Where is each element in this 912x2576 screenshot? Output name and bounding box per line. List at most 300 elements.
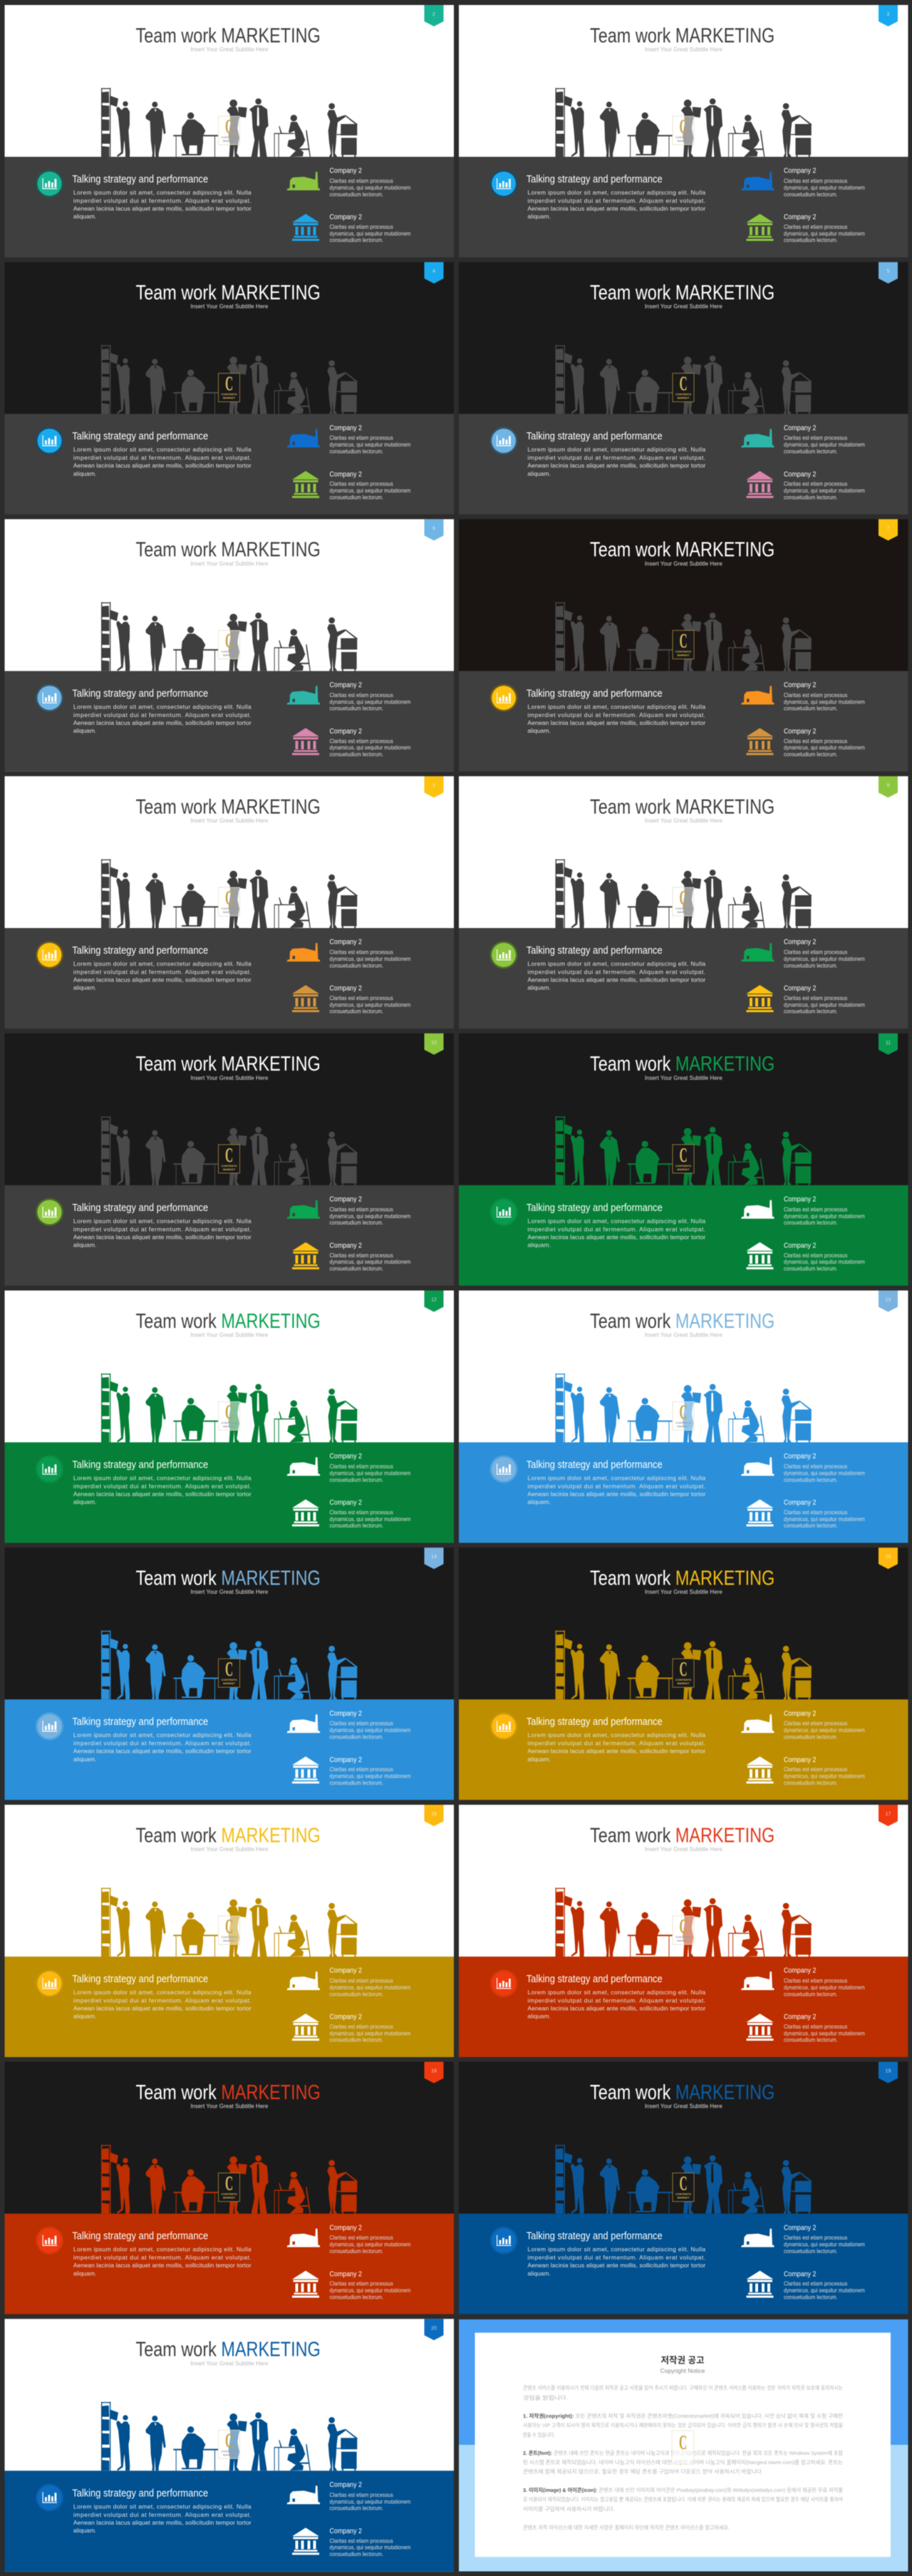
factory icon <box>286 686 320 704</box>
page ribbon: 6 <box>432 526 435 531</box>
subtitle: Insert Your Great Subtitle Here <box>645 1846 722 1853</box>
paragraph <box>527 1989 705 2020</box>
page ribbon: 2 <box>432 12 435 17</box>
paragraph: imperdiet volutpat dui at fermentum. Aliquam erat volutpat. <box>527 711 705 718</box>
notice section 3 image and icon <box>523 2487 843 2512</box>
paragraph <box>73 189 252 220</box>
company block 1 <box>329 1967 410 1997</box>
page ribbon <box>879 1805 898 1826</box>
watermark badge <box>673 2173 694 2202</box>
watermark badge <box>218 1401 239 1430</box>
company block 1 <box>784 938 865 969</box>
company block 2 <box>784 984 865 1015</box>
watermark badge: MARKET <box>677 1168 690 1171</box>
slide 8 <box>4 776 454 1029</box>
page ribbon <box>879 519 898 540</box>
company block 1: consuetudium lectorum. <box>329 1220 383 1226</box>
company block 2: Company 2 <box>329 984 362 993</box>
title: Team work MARKETING <box>135 2337 321 2361</box>
subtitle: Insert Your Great Subtitle Here <box>190 304 269 310</box>
bottom band <box>459 1443 908 1542</box>
chart icon <box>36 1456 63 1483</box>
heading: Talking strategy and performance <box>527 944 663 956</box>
heading: Talking strategy and performance <box>72 944 208 956</box>
bank icon <box>292 1500 319 1527</box>
paragraph: imperdiet volutpat dui at fermentum. Aliquam erat volutpat. <box>73 1740 252 1747</box>
heading: Talking strategy and performance <box>72 1459 208 1470</box>
paragraph <box>73 703 252 734</box>
watermark badge <box>218 2430 239 2458</box>
watermark badge: C <box>679 1401 688 1423</box>
bank icon <box>292 728 319 755</box>
paragraph: imperdiet volutpat dui at fermentum. Aliquam erat volutpat. <box>73 1997 252 2004</box>
heading: Talking strategy and performance <box>72 2230 208 2242</box>
company block 2: dynamicus, qui sequitur mutationem <box>329 1515 410 1523</box>
page ribbon: 13 <box>886 1297 891 1303</box>
watermark badge: MARKET <box>677 1939 690 1942</box>
company block 2: Claritas est etiam processus <box>329 2024 393 2030</box>
notice background top <box>459 2319 908 2445</box>
notice intro: 콘텐츠 서비스를 이용하시기 전에 다음의 저작권 공고 사항을 읽어 주시기 바랍니다. 구매하신 이 콘텐츠 서비스를 이용하는 것은 귀하가 저작권 보호에 동의하시는 <box>523 2385 843 2391</box>
company block 2: Claritas est etiam processus <box>784 995 848 1001</box>
company block 2: Claritas est etiam processus <box>784 738 848 745</box>
heading: Talking strategy and performance <box>527 1716 663 1727</box>
company block 2: Company 2 <box>784 213 816 222</box>
subtitle: Insert Your Great Subtitle Here <box>190 560 269 567</box>
heading: Talking strategy and performance <box>72 688 208 699</box>
subtitle: Insert Your Great Subtitle Here <box>645 304 722 310</box>
subtitle: Insert Your Great Subtitle Here <box>645 2103 722 2110</box>
paragraph <box>73 1474 252 1505</box>
chart icon <box>490 941 517 969</box>
title: Team work MARKETING <box>590 795 774 818</box>
slide background <box>4 1805 454 2057</box>
watermark badge: MARKET <box>223 2196 236 2200</box>
title: Team work MARKETING <box>135 537 321 561</box>
company block 2: Claritas est etiam processus <box>329 1766 393 1773</box>
title: Team work MARKETING <box>590 1309 774 1332</box>
company block 1 <box>784 1967 865 1997</box>
slide background <box>459 1034 908 1286</box>
page ribbon: 11 <box>886 1041 891 1046</box>
paragraph <box>73 2246 252 2277</box>
paragraph: imperdiet volutpat dui at fermentum. Aliquam erat volutpat. <box>73 1225 252 1232</box>
company block 2: Claritas est etiam processus <box>329 1252 393 1259</box>
watermark badge: MARKET <box>677 396 690 400</box>
watermark badge: MARKET <box>223 1424 236 1428</box>
factory icon <box>286 429 320 448</box>
heading: Talking strategy and performance <box>72 1202 208 1213</box>
company block 1: Company 2 <box>329 2224 362 2232</box>
paragraph: Aenean lacinia lacus aliquet ante mollis, sollicitudin tempor tortor <box>73 462 252 469</box>
company block 2: Claritas est etiam processus <box>784 1252 848 1259</box>
page ribbon: 15 <box>886 1555 891 1560</box>
notice watermark badge: C <box>679 2431 687 2453</box>
company block 2: dynamicus, qui sequitur mutationem <box>784 1515 865 1523</box>
subtitle: Insert Your Great Subtitle Here <box>645 1075 722 1081</box>
watermark badge: CONTENTS <box>221 2449 237 2453</box>
slide background <box>4 2062 454 2314</box>
company block 1: Company 2 <box>784 681 816 689</box>
factory icon <box>741 1200 774 1219</box>
company block 1: consuetudium lectorum. <box>784 1476 837 1483</box>
office silhouette <box>555 1374 812 1442</box>
company block 2: consuetudium lectorum. <box>329 1265 383 1272</box>
slide 18 <box>4 2062 454 2314</box>
paragraph: aliquam. <box>527 1756 551 1763</box>
chart icon <box>490 684 517 712</box>
company block 2: dynamicus, qui sequitur mutationem <box>329 1259 410 1265</box>
company block 2: consuetudium lectorum. <box>784 1523 837 1529</box>
page ribbon: 10 <box>431 1041 437 1046</box>
company block 1: Claritas est etiam processus <box>329 1206 393 1212</box>
paragraph: Lorem ipsum dolor sit amet, consectetur adipiscing elit. Nulla <box>527 189 705 196</box>
company block 1: Company 2 <box>329 424 362 433</box>
company block 1: Claritas est etiam processus <box>784 692 848 699</box>
slide background <box>459 262 908 515</box>
title: Team work MARKETING <box>590 281 774 304</box>
factory icon <box>286 1972 320 1990</box>
paragraph: Lorem ipsum dolor sit amet, consectetur adipiscing elit. Nulla <box>73 189 252 196</box>
watermark badge: MARKET <box>223 139 236 143</box>
paragraph: Aenean lacinia lacus aliquet ante mollis, sollicitudin tempor tortor <box>73 205 252 212</box>
company block 1: Company 2 <box>329 1967 362 1975</box>
paragraph: Aenean lacinia lacus aliquet ante mollis, sollicitudin tempor tortor <box>527 2262 705 2269</box>
bank icon <box>292 1242 319 1269</box>
company block 2: consuetudium lectorum. <box>784 2036 837 2044</box>
watermark badge: CONTENTS <box>675 2193 691 2196</box>
slide background <box>459 1547 908 1800</box>
paragraph: Aenean lacinia lacus aliquet ante mollis, sollicitudin tempor tortor <box>73 977 252 984</box>
chart icon <box>36 684 63 712</box>
company block 1: dynamicus, qui sequitur mutationem <box>329 2241 410 2248</box>
company block 1: dynamicus, qui sequitur mutationem <box>784 699 865 706</box>
heading: Talking strategy and performance <box>527 688 663 699</box>
subtitle: Insert Your Great Subtitle Here <box>645 46 722 53</box>
watermark badge: C <box>679 1915 688 1937</box>
paragraph: Lorem ipsum dolor sit amet, consectetur adipiscing elit. Nulla <box>527 1474 705 1481</box>
paragraph: aliquam. <box>73 1242 96 1249</box>
office silhouette <box>101 2145 358 2214</box>
page ribbon: 17 <box>886 1812 891 1817</box>
company block 2: Company 2 <box>329 1242 362 1250</box>
chart icon <box>490 427 517 455</box>
watermark badge <box>673 1658 694 1687</box>
company block 1: Company 2 <box>329 1195 362 1204</box>
watermark badge: MARKET <box>223 910 236 914</box>
company block 2 <box>784 2270 865 2300</box>
company block 1: Company 2 <box>329 938 362 947</box>
company block 2: Company 2 <box>784 984 816 993</box>
company block 1: consuetudium lectorum. <box>329 2248 383 2255</box>
page ribbon <box>425 2319 443 2340</box>
watermark badge: C <box>679 115 688 138</box>
company block 1: Claritas est etiam processus <box>784 2235 848 2241</box>
company block 1: dynamicus, qui sequitur mutationem <box>329 185 410 191</box>
office silhouette <box>101 2402 358 2471</box>
bottom band <box>4 1443 454 1542</box>
notice section 1 copyright: 사용자는 VIP 고객이 되시어 영리 목적으로 이용하시거나 재판매하지 못하는 것은 금지되어 있습니다. 이러한 금지 행위가 발견 시 손해 민사 및 형사상의 처벌을 <box>523 2422 843 2428</box>
factory icon <box>286 172 320 190</box>
page ribbon: 7 <box>887 526 890 531</box>
paragraph: imperdiet volutpat dui at fermentum. Aliquam erat volutpat. <box>73 2511 252 2518</box>
watermark badge: MARKET <box>677 910 690 914</box>
watermark badge: C <box>679 630 688 652</box>
slide background <box>459 1290 908 1542</box>
paragraph <box>73 1989 252 2020</box>
company block 2: Company 2 <box>329 1756 362 1764</box>
page ribbon: 4 <box>432 269 435 274</box>
paragraph: imperdiet volutpat dui at fermentum. Aliquam erat volutpat. <box>527 968 705 975</box>
company block 2: consuetudium lectorum. <box>784 1008 837 1015</box>
paragraph: Lorem ipsum dolor sit amet, consectetur adipiscing elit. Nulla <box>527 1731 705 1738</box>
bottom band <box>459 1699 908 1800</box>
paragraph <box>73 446 252 477</box>
company block 1: consuetudium lectorum. <box>329 705 383 712</box>
paragraph: aliquam. <box>73 2013 96 2020</box>
company block 2: dynamicus, qui sequitur mutationem <box>329 2030 410 2036</box>
watermark badge: CONTENTS <box>675 1421 691 1424</box>
paragraph: imperdiet volutpat dui at fermentum. Aliquam erat volutpat. <box>73 968 252 975</box>
page ribbon: 14 <box>431 1555 437 1560</box>
company block 1: consuetudium lectorum. <box>784 2248 837 2255</box>
page ribbon <box>879 262 898 284</box>
watermark badge <box>218 887 239 916</box>
bottom band <box>4 1185 454 1286</box>
company block 1: consuetudium lectorum. <box>329 1991 383 1997</box>
bank icon <box>747 985 774 1012</box>
subtitle: Insert Your Great Subtitle Here <box>645 560 722 567</box>
company block 2: dynamicus, qui sequitur mutationem <box>329 1001 410 1008</box>
slide background <box>459 1805 908 2057</box>
paragraph: aliquam. <box>527 1498 551 1505</box>
paragraph: Lorem ipsum dolor sit amet, consectetur adipiscing elit. Nulla <box>73 1474 252 1481</box>
paragraph <box>527 703 705 734</box>
company block 1: Claritas est etiam processus <box>329 2235 393 2241</box>
heading: Talking strategy and performance <box>527 173 663 185</box>
subtitle: Insert Your Great Subtitle Here <box>190 1846 269 1853</box>
company block 2 <box>329 2270 410 2300</box>
company block 2: consuetudium lectorum. <box>784 1265 837 1272</box>
notice section 3 image and icon: 이미지를 구입하여 사용하시기 바랍니다. <box>523 2506 615 2512</box>
slide background <box>4 1290 454 1542</box>
bottom band <box>4 2214 454 2314</box>
paragraph: Aenean lacinia lacus aliquet ante mollis, sollicitudin tempor tortor <box>527 462 705 469</box>
title: Team work MARKETING <box>135 1309 321 1332</box>
slide 11 <box>459 1034 908 1286</box>
paragraph: imperdiet volutpat dui at fermentum. Aliquam erat volutpat. <box>73 2254 252 2261</box>
company block 1: dynamicus, qui sequitur mutationem <box>329 956 410 962</box>
watermark badge: C <box>225 887 233 909</box>
title: Team work MARKETING <box>590 1823 774 1847</box>
bottom band <box>4 928 454 1029</box>
company block 1: consuetudium lectorum. <box>784 1991 837 1997</box>
factory icon <box>286 943 320 962</box>
paragraph <box>527 960 705 991</box>
page ribbon <box>879 1034 898 1055</box>
slide background <box>4 519 454 771</box>
notice section 1 copyright <box>523 2413 843 2438</box>
office silhouette <box>101 859 358 928</box>
subtitle: Insert Your Great Subtitle Here <box>190 818 269 824</box>
company block 2: Claritas est etiam processus <box>329 2538 393 2544</box>
factory icon <box>286 1457 320 1475</box>
watermark badge: CONTENTS <box>675 649 691 653</box>
slide 19 <box>459 2062 908 2314</box>
watermark badge: CONTENTS <box>675 1164 691 1168</box>
paragraph: aliquam. <box>73 1756 96 1763</box>
paragraph: aliquam. <box>527 1242 551 1249</box>
company block 2: consuetudium lectorum. <box>329 1523 383 1529</box>
company block 2: Company 2 <box>784 1499 816 1507</box>
office silhouette <box>101 1631 358 1699</box>
factory icon <box>286 1200 320 1219</box>
company block 1 <box>329 1453 410 1483</box>
company block 1 <box>784 424 865 455</box>
heading: Talking strategy and performance <box>527 2230 663 2242</box>
company block 1 <box>784 1195 865 1226</box>
watermark badge: MARKET <box>223 653 236 656</box>
slide 5 <box>459 262 908 515</box>
notice intro <box>523 2385 843 2401</box>
chart icon <box>36 1969 63 1997</box>
bank icon <box>747 471 774 498</box>
slide 6 <box>4 519 454 771</box>
paragraph: imperdiet volutpat dui at fermentum. Aliquam erat volutpat. <box>73 1483 252 1490</box>
paragraph: Lorem ipsum dolor sit amet, consectetur adipiscing elit. Nulla <box>527 2246 705 2253</box>
paragraph: Lorem ipsum dolor sit amet, consectetur adipiscing elit. Nulla <box>527 960 705 967</box>
company block 1: dynamicus, qui sequitur mutationem <box>784 1727 865 1733</box>
company block 1 <box>329 167 410 197</box>
office silhouette <box>555 1887 812 1957</box>
company block 1: dynamicus, qui sequitur mutationem <box>329 699 410 706</box>
watermark badge: CONTENTS <box>221 2193 237 2196</box>
company block 1: dynamicus, qui sequitur mutationem <box>784 956 865 962</box>
paragraph <box>73 960 252 991</box>
company block 1: consuetudium lectorum. <box>329 1733 383 1741</box>
paragraph: Lorem ipsum dolor sit amet, consectetur adipiscing elit. Nulla <box>527 1217 705 1225</box>
watermark badge: MARKET <box>677 653 690 656</box>
chart icon <box>36 2483 63 2512</box>
paragraph <box>527 1474 705 1505</box>
watermark badge: MARKET <box>223 1681 236 1685</box>
notice section 1 copyright: 1. 저작권(copyright): 모든 콘텐츠의 저작 및 저작권은 콘텐츠마켓(Contentsmarket)에 귀속되어 있습니다. 사전 승낙 없이 복제 및 수정 구매한 <box>523 2413 843 2419</box>
company block 1: Company 2 <box>784 1967 816 1975</box>
slide 17 <box>459 1805 908 2057</box>
factory icon <box>741 1457 774 1475</box>
slide 16 <box>4 1805 454 2057</box>
paragraph <box>527 1731 705 1763</box>
page ribbon <box>425 519 443 540</box>
paragraph: imperdiet volutpat dui at fermentum. Aliquam erat volutpat. <box>527 1483 705 1490</box>
company block 2: consuetudium lectorum. <box>329 751 383 758</box>
page ribbon: 9 <box>887 783 890 788</box>
subtitle: Insert Your Great Subtitle Here <box>190 1589 269 1595</box>
chart icon <box>36 1712 63 1740</box>
chart icon <box>490 1712 517 1740</box>
company block 2: Claritas est etiam processus <box>784 2280 848 2287</box>
bottom band <box>459 1957 908 2057</box>
watermark badge <box>218 1915 239 1944</box>
slide 9 <box>459 776 908 1029</box>
watermark badge <box>673 115 694 145</box>
company block 1: dynamicus, qui sequitur mutationem <box>329 1212 410 1220</box>
page ribbon: 12 <box>431 1297 437 1303</box>
company block 1: dynamicus, qui sequitur mutationem <box>784 1984 865 1991</box>
slide 2 <box>4 5 454 257</box>
company block 2: dynamicus, qui sequitur mutationem <box>784 2287 865 2294</box>
company block 1 <box>784 681 865 712</box>
company block 1: consuetudium lectorum. <box>329 962 383 969</box>
factory icon <box>286 1714 320 1733</box>
notice watermark badge <box>672 2431 694 2464</box>
company block 1: Claritas est etiam processus <box>329 1463 393 1470</box>
company block 2: dynamicus, qui sequitur mutationem <box>329 1773 410 1780</box>
notice background bottom <box>459 2445 908 2572</box>
watermark badge: MARKET <box>677 1681 690 1685</box>
company block 1: consuetudium lectorum. <box>784 1220 837 1226</box>
chart icon <box>490 2227 517 2255</box>
title: Team work MARKETING <box>135 1566 321 1590</box>
bank icon <box>747 214 774 241</box>
paragraph <box>527 446 705 477</box>
company block 2 <box>329 213 410 244</box>
company block 1 <box>784 1709 865 1741</box>
watermark badge: CONTENTS <box>221 393 237 396</box>
title: Team work MARKETING <box>135 2081 321 2103</box>
company block 2: consuetudium lectorum. <box>784 751 837 758</box>
page ribbon <box>425 776 443 798</box>
bank icon <box>292 2014 319 2041</box>
subtitle: Insert Your Great Subtitle Here <box>645 1331 722 1339</box>
company block 2: Claritas est etiam processus <box>329 224 393 230</box>
watermark badge: C <box>679 1144 688 1166</box>
company block 1 <box>329 424 410 455</box>
paragraph: Aenean lacinia lacus aliquet ante mollis, sollicitudin tempor tortor <box>527 1490 705 1498</box>
watermark badge <box>218 630 239 659</box>
paragraph: imperdiet volutpat dui at fermentum. Aliquam erat volutpat. <box>527 197 705 204</box>
slide background <box>4 2319 454 2572</box>
company block 2: Company 2 <box>784 1756 816 1764</box>
watermark badge: CONTENTS <box>675 1935 691 1939</box>
heading: Talking strategy and performance <box>527 431 663 442</box>
company block 1: Company 2 <box>329 681 362 689</box>
factory icon <box>741 1714 774 1733</box>
factory icon <box>286 2229 320 2247</box>
subtitle: Insert Your Great Subtitle Here <box>190 1075 269 1081</box>
company block 1: Claritas est etiam processus <box>329 949 393 956</box>
office silhouette <box>555 859 812 928</box>
subtitle: Insert Your Great Subtitle Here <box>645 1589 722 1595</box>
notice section 1 copyright: 받을 수 있습니다. <box>523 2432 555 2438</box>
company block 1: Claritas est etiam processus <box>329 1977 393 1984</box>
bottom band <box>459 1185 908 1286</box>
company block 1: Claritas est etiam processus <box>784 1720 848 1727</box>
watermark badge: MARKET <box>223 2453 236 2456</box>
company block 2: dynamicus, qui sequitur mutationem <box>784 1259 865 1265</box>
company block 2: consuetudium lectorum. <box>329 237 383 244</box>
page ribbon: 5 <box>887 269 890 274</box>
paragraph: imperdiet volutpat dui at fermentum. Aliquam erat volutpat. <box>527 1225 705 1232</box>
bottom band <box>4 671 454 771</box>
paragraph: Aenean lacinia lacus aliquet ante mollis, sollicitudin tempor tortor <box>527 205 705 212</box>
bank icon <box>292 1756 319 1783</box>
company block 2: Company 2 <box>784 728 816 736</box>
company block 1: dynamicus, qui sequitur mutationem <box>784 185 865 191</box>
watermark badge: MARKET <box>677 2196 690 2200</box>
notice intro: 것임을 밝힙니다. <box>523 2395 568 2401</box>
bank icon <box>292 214 319 241</box>
